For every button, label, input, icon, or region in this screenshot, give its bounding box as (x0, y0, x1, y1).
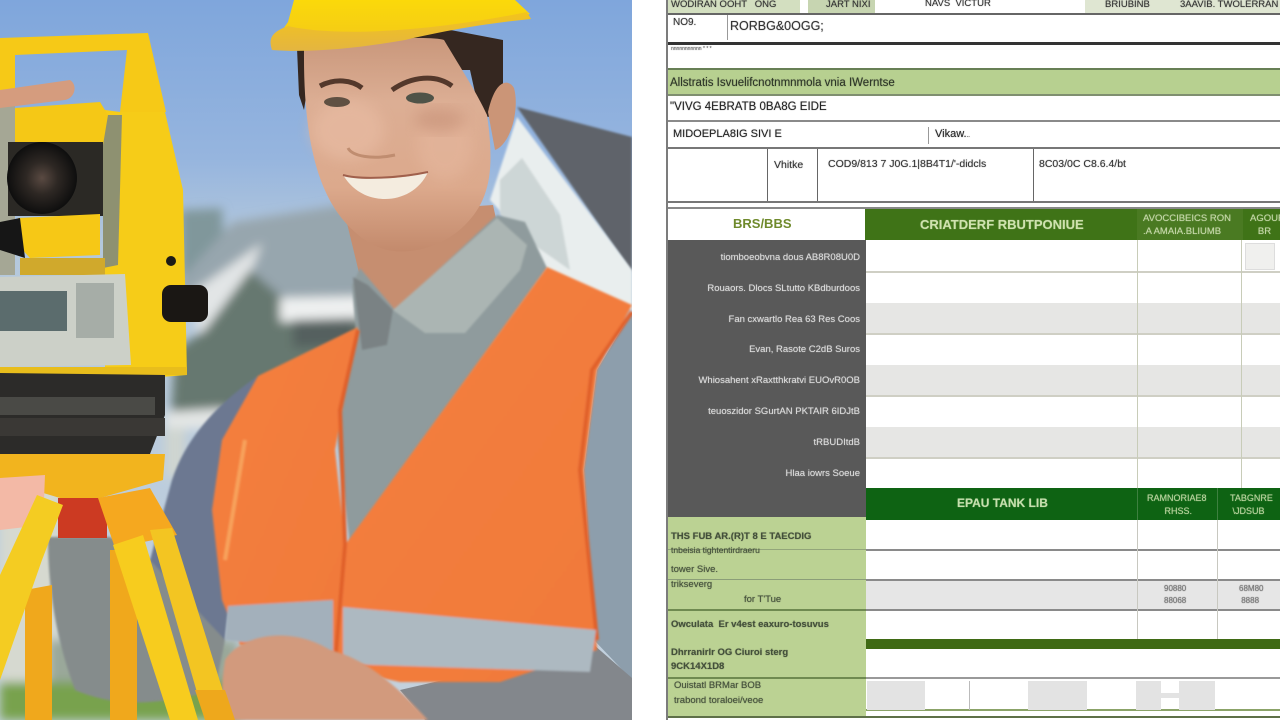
operator fingers (0, 80, 75, 108)
checklist labels: Whiosahent xRaxtthkratvi EUOvR0OB (698, 375, 860, 386)
criteria header: BR (1258, 226, 1271, 237)
reference row: NO9. (673, 17, 696, 28)
second table: green label column (668, 517, 866, 717)
checklist labels: tRBUDItdB (814, 437, 860, 448)
criteria header (668, 207, 1280, 240)
note row: nnnnnnnnnnn * * * (671, 46, 712, 52)
head (297, 28, 516, 252)
total station instrument (0, 33, 235, 720)
right sleeve (584, 312, 632, 680)
criteria header: AVOCCIBEICS RON (1143, 213, 1231, 224)
second table: green label column: Dhrranirlr OG Ciuroi sterg (671, 647, 788, 658)
second table: green label column: trabond toraloei/veoe (674, 695, 763, 706)
checklist labels (698, 252, 860, 479)
second table: green label column: tower Sive. (671, 564, 718, 575)
checklist labels: teuoszidor SGurtAN PKTAIR 6IDJtB (708, 406, 860, 417)
second table: green label column: Owculata Er v4est eaxuro-tosuvus (671, 619, 829, 630)
second table: green label column: Ouistatl BRMar BOB (674, 680, 761, 691)
green section heading: Allstratis Isvuelifcnotnmnmola vnia IWerntse (670, 77, 895, 89)
camera housing (14, 102, 108, 150)
checklist labels: Hlaa iowrs Soeue (786, 468, 860, 479)
details row (668, 149, 1280, 203)
second table: body rows: 8888 (1241, 596, 1259, 605)
tripod legs (25, 585, 52, 720)
model row: Vikaw... (935, 128, 970, 140)
second table: green label column: THS FUB AR.(R)T 8 E TAECDIG (671, 531, 811, 542)
form bottom rule (668, 716, 1280, 718)
second table: body rows (866, 520, 1280, 710)
criteria header: CRIATDERF RBUTPONIUE (920, 217, 1084, 232)
criteria header: .A AMAIA.BLIUMB (1143, 226, 1221, 237)
second table header (866, 488, 1280, 520)
details row: Vhitke (774, 159, 803, 171)
dark label column (668, 240, 866, 517)
instrument body (105, 110, 187, 380)
surveyor row: "VIVG 4EBRATB 0BA8G EIDE (670, 101, 827, 113)
grey row values: 90880 (1164, 584, 1186, 593)
dark green divider band (866, 639, 1280, 649)
tripod head (0, 454, 165, 498)
neck (345, 205, 505, 345)
model row (668, 122, 1280, 149)
left arm and sleeve (48, 376, 258, 702)
form header row (668, 0, 1280, 15)
second table: body rows: 68M80 (1239, 584, 1263, 593)
second table: green label column: trikseverg (671, 579, 712, 590)
checklist table: shaded rows (866, 240, 1280, 488)
details row: 8C03/0C C8.6.4/bt (1039, 158, 1126, 170)
carry handle (0, 33, 166, 112)
red mount (58, 498, 107, 538)
hand (222, 636, 428, 720)
second table header: RAMNORIAE8 (1147, 493, 1207, 503)
final row (866, 677, 1280, 711)
lower shirt (400, 645, 632, 720)
reference row (668, 15, 1280, 45)
pink tag (0, 475, 45, 530)
shirt (335, 215, 547, 545)
form sheet (666, 0, 1280, 720)
criteria header: BRS/BBS (733, 216, 792, 231)
second table header: RHSS. (1164, 506, 1192, 516)
second table header: EPAU TANK LIB (957, 496, 1048, 510)
background: sky and blurred houses (0, 0, 632, 720)
grey row values: 88068 (1164, 596, 1186, 605)
surveyor row (668, 96, 1280, 122)
checklist labels: Rouaors. Dlocs SLtutto KBdburdoos (707, 283, 860, 294)
reference row: RORBG&0OGG; (730, 19, 824, 33)
checklist labels: Evan, Rasote C2dB Suros (749, 344, 860, 355)
green section heading (668, 68, 1280, 96)
second table header: TABGNRE (1230, 493, 1273, 503)
details row: COD9/813 7 J0G.1|8B4T1/'-didcls (828, 158, 986, 170)
side knob (162, 285, 208, 322)
second table: green label column: for T'Tue (744, 594, 781, 605)
model row: MIDOEPLA8IG SIVI E (673, 128, 782, 140)
checklist labels: tiomboeobvna dous AB8R08U0D (721, 252, 860, 263)
reflective strips (225, 600, 596, 672)
second table header: \JDSUB (1232, 506, 1265, 516)
hard hat (271, 0, 531, 51)
control panel (0, 274, 131, 367)
photo: surveyor with total station (0, 0, 632, 720)
checklist labels: Fan cxwartlo Rea 63 Res Coos (729, 314, 860, 325)
second table: green label column: 9CK14X1D8 (671, 661, 724, 672)
tribrach base (0, 373, 165, 454)
second table: green label column: tnbeisia tightentirdraeru (671, 545, 760, 555)
safety vest (212, 267, 632, 682)
grey row values (1164, 584, 1186, 605)
